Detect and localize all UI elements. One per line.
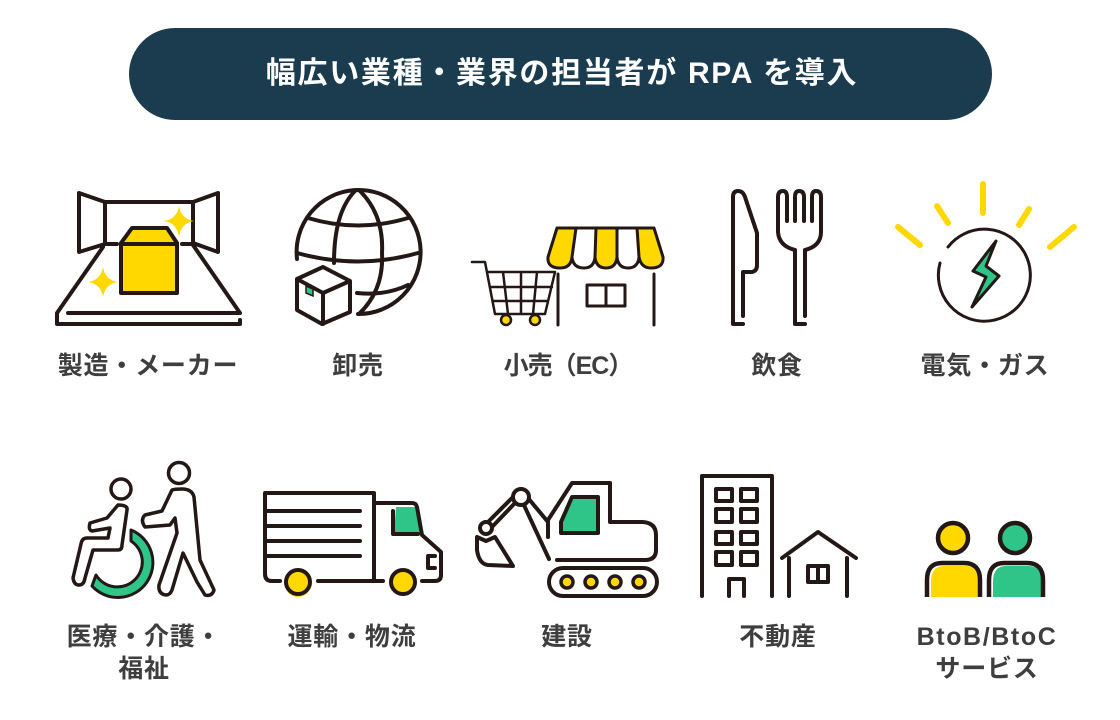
label: wholesale: 卸売 <box>332 352 384 380</box>
icon: excavator <box>477 483 657 596</box>
label: electricity and gas: 電気・ガス <box>920 352 1050 380</box>
icon: electricity <box>898 184 1074 321</box>
label: retail EC: 小売（EC） <box>504 352 632 380</box>
label: real estate: 不動産 <box>739 623 817 651</box>
label: medical and welfare: 医療・介護・ <box>67 623 221 651</box>
label: logistics: 運輸・物流 <box>287 623 417 651</box>
title banner <box>129 28 992 120</box>
label: medical and welfare: 福祉 <box>118 655 170 683</box>
icon: building and house <box>702 476 856 596</box>
icon: truck <box>265 493 441 597</box>
label: medical and welfare <box>67 623 221 683</box>
icon: globe with package <box>297 190 421 324</box>
label: B2B B2C services: サービス <box>935 655 1039 683</box>
icon: people <box>927 523 1043 597</box>
label: construction: 建設 <box>541 623 593 651</box>
icon: manufacturing <box>57 193 240 324</box>
icon: medical care <box>73 462 214 597</box>
title banner: 幅広い業種・業界の担当者が RPA を導入 <box>266 56 858 90</box>
label: B2B B2C services: BtoB/BtoC <box>917 623 1057 651</box>
icon: knife and fork <box>733 191 821 324</box>
label: manufacturing: 製造・メーカー <box>58 352 238 380</box>
icon: cart and storefront <box>472 228 663 325</box>
label: B2B B2C services <box>917 623 1057 683</box>
label: food: 飲食 <box>751 352 803 380</box>
